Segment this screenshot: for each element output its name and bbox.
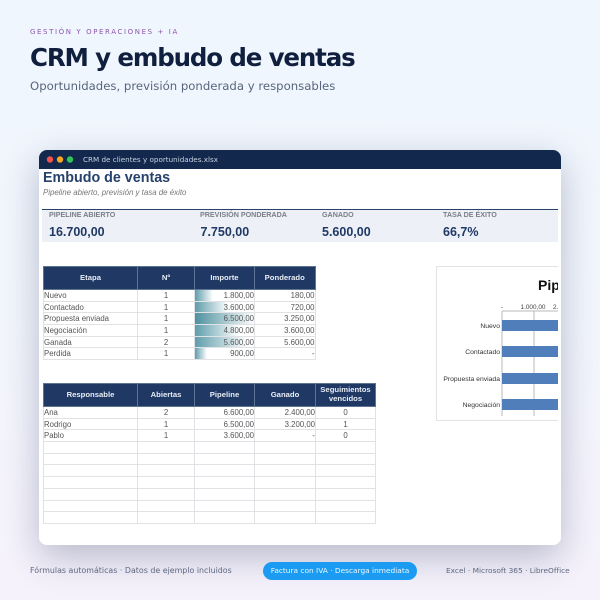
table: responsables: Ganado	[271, 390, 299, 399]
table: etapas: Nuevo	[44, 291, 67, 300]
panel: spreadsheet window	[39, 150, 561, 545]
table: responsables: 2.400,00	[285, 408, 315, 417]
table: responsables: Ana	[44, 408, 58, 417]
table: responsables: 1	[164, 420, 168, 429]
title: CRM y embudo de ventas	[30, 43, 355, 72]
KPI: prevision value: 7.750,00	[200, 225, 249, 239]
table: responsables: 0	[343, 431, 348, 440]
chart: pipeline por etapa (clipped): -	[501, 304, 503, 311]
table: etapas: 4.800,00	[224, 326, 254, 335]
window shadow	[39, 150, 561, 545]
KPI: tasa value: 66,7%	[443, 225, 478, 239]
sheet title: Embudo de ventas	[43, 170, 170, 186]
table: etapas: 5.600,00	[224, 338, 254, 347]
table: responsables: -	[312, 431, 315, 440]
table: etapas: 720,00	[291, 303, 314, 312]
table: etapas: Ponderado	[265, 273, 305, 282]
table: responsables: 1	[164, 431, 168, 440]
table: etapas: Contactado	[44, 303, 84, 312]
file name: CRM de clientes y oportunidades.xlsx	[83, 155, 218, 164]
icon: window buttons	[46, 156, 74, 163]
table: etapas: 1	[164, 349, 168, 358]
table: etapas: -	[312, 349, 314, 358]
window title bar	[39, 150, 561, 169]
table: responsables: 0	[343, 408, 348, 417]
table: responsables: Rodrigo	[44, 420, 71, 429]
table: etapas: Perdida	[44, 349, 71, 358]
table: etapas: Etapa	[80, 273, 101, 282]
table: responsables: Seguimientos vencidos	[320, 385, 371, 403]
footer right note: Excel · Microsoft 365 · LibreOffice	[446, 566, 570, 575]
table: etapas: 1	[164, 303, 168, 312]
chart: pipeline por etapa (clipped): Nuevo	[480, 323, 500, 330]
table: responsables: Pipeline	[210, 390, 239, 399]
table: responsables: 6.500,00	[224, 420, 254, 429]
chart: pipeline por etapa (clipped): Contactado	[465, 349, 500, 356]
table: etapas: Nº	[162, 273, 170, 282]
KPI: pipeline abierto label: PIPELINE ABIERTO	[49, 211, 115, 219]
table: etapas: 1	[164, 314, 168, 323]
table: responsables: Responsable	[67, 390, 114, 399]
KPI: tasa label: TASA DE ÉXITO	[443, 211, 497, 219]
table: responsables	[43, 383, 376, 524]
footer left note: Fórmulas automáticas · Datos de ejemplo incluidos	[30, 566, 232, 575]
KPI: ganado label: GANADO	[322, 211, 354, 219]
KPI: prevision label: PREVISIÓN PONDERADA	[200, 211, 287, 219]
table: etapas: 5.600,00	[284, 338, 314, 347]
table: responsables: 3.200,00	[285, 420, 315, 429]
chart: pipeline por etapa (clipped): 1.000,00	[521, 304, 546, 311]
table: etapas: Propuesta enviada	[44, 314, 109, 323]
table: etapas: 2	[164, 338, 168, 347]
table: etapas: 1	[164, 291, 168, 300]
table: etapas	[43, 266, 316, 360]
table: etapas: 1	[164, 326, 168, 335]
table: etapas: 3.600,00	[284, 326, 314, 335]
table: etapas: Negociación	[44, 326, 87, 335]
chart: pipeline por etapa (clipped): Propuesta enviada	[443, 376, 500, 383]
table: etapas: 900,00	[230, 349, 254, 358]
table: responsables: Pablo	[44, 431, 64, 440]
footer badge	[263, 562, 417, 580]
table: etapas: 1.800,00	[224, 291, 254, 300]
panel: KPI band	[42, 209, 558, 242]
table: responsables: Abiertas	[151, 390, 181, 399]
table: etapas: 180,00	[291, 291, 314, 300]
chart: pipeline por etapa (clipped): Negociación	[463, 402, 500, 409]
KPI: pipeline abierto value: 16.700,00	[49, 225, 105, 239]
table: responsables: 2	[164, 408, 168, 417]
table: etapas: 6.500,00	[224, 314, 254, 323]
subtitle: Oportunidades, previsión ponderada y responsables	[30, 79, 335, 93]
table: etapas: 3.600,00	[224, 303, 254, 312]
table: responsables: 3.600,00	[224, 431, 254, 440]
table: etapas: Importe	[210, 273, 239, 282]
table: etapas: 3.250,00	[284, 314, 314, 323]
footer badge: Factura con IVA · Descarga inmediata	[271, 566, 409, 575]
sheet subtitle: Pipeline abierto, previsión y tasa de éxito	[43, 188, 186, 197]
chart: pipeline por etapa (clipped)	[436, 266, 558, 421]
table: etapas: Ganada	[44, 338, 72, 347]
eyebrow: GESTIÓN Y OPERACIONES + IA	[30, 28, 179, 36]
table: responsables: 1	[343, 420, 348, 429]
table: responsables: 6.600,00	[224, 408, 254, 417]
KPI: ganado value: 5.600,00	[322, 225, 371, 239]
